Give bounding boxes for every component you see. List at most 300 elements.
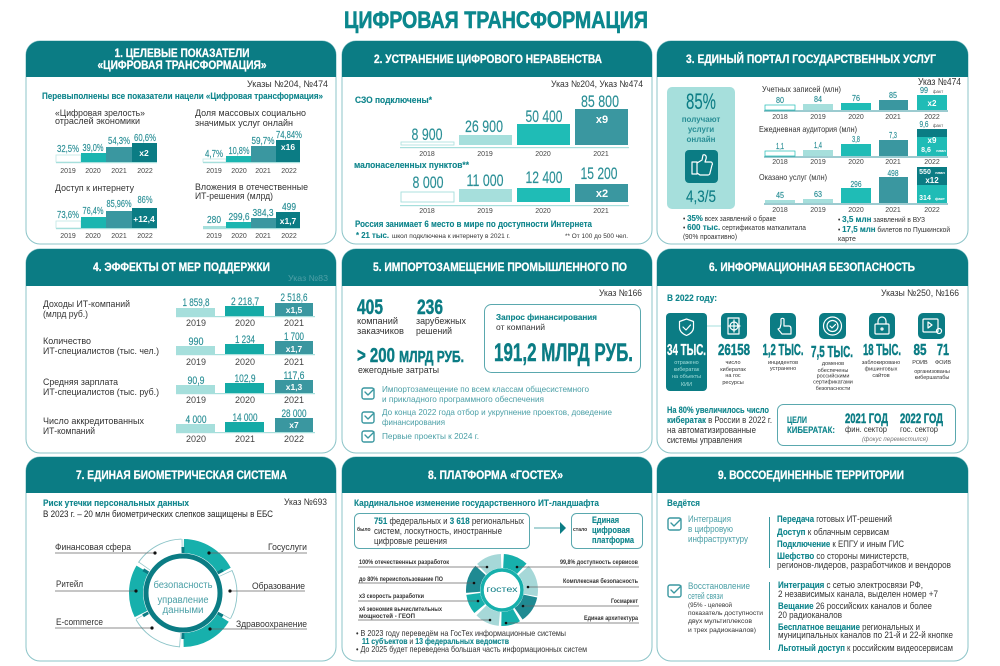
chart: daily audience: 8,6	[921, 147, 931, 154]
box: after: Единая	[592, 515, 619, 525]
chart: services delivered: 45	[776, 191, 784, 200]
icon: check 1	[362, 388, 374, 399]
checklist: финансирования	[382, 417, 445, 427]
heading 6: 6. ИНФОРМАЦИОННАЯ БЕЗОПАСНОСТЬ	[709, 262, 915, 274]
bullets right: карте	[838, 236, 856, 243]
row: IT revenue: 1 859,8	[182, 297, 210, 309]
icon: thumbs up	[685, 150, 718, 183]
label: compute savings: x4 экономия вычислительных	[359, 606, 442, 613]
row: IT revenue: 2021	[284, 318, 304, 328]
chart: internet access: 76,4%	[82, 206, 104, 217]
list: integration details	[777, 514, 951, 570]
list: network details: 2 независимых канала, выделен номер +7	[778, 589, 938, 599]
stat: 26158 attacks on state resources: на гос	[725, 373, 741, 379]
stat: 405 customers: 405	[357, 296, 383, 319]
callout: attack targets: гос. сектор	[900, 425, 939, 434]
item: network restoration: сетей связи	[688, 591, 723, 601]
stat: yearly costs	[357, 345, 464, 375]
box: after: цифровая	[592, 525, 630, 535]
note: 80 percent growth: системы управления	[667, 435, 742, 445]
label: education	[228, 581, 305, 593]
chart: daily audience: 1,1	[776, 142, 784, 151]
chart: internet access	[55, 183, 157, 240]
chart: small settlements	[354, 160, 629, 215]
donut diagram: безопасность	[154, 579, 212, 591]
row: IT specialists: 2019	[186, 357, 206, 367]
chart: small settlements: x2	[596, 188, 608, 200]
icon: check integration	[668, 518, 681, 530]
chart: accounts: факт	[933, 89, 943, 94]
callout: 85 percent online: услуги	[688, 125, 714, 134]
list: integration details: регионов-лидеров, разработчиков и вендоров	[777, 560, 951, 570]
list: integration details: Передача готовых ИТ-решений	[777, 514, 892, 524]
bullets left: • 35% всех заявлений о браке	[683, 213, 776, 223]
row: accredited companies: 2022	[284, 434, 304, 444]
chart: daily audience: 2018	[772, 159, 788, 166]
note: 80 percent growth: На 80% увеличилось число	[667, 405, 769, 415]
chart: daily audience: факт	[933, 123, 943, 128]
list: network details: Вещание 26 российских каналов и более	[778, 601, 932, 611]
row: IT specialists: 2021	[284, 357, 304, 367]
list: network details	[778, 580, 953, 653]
chart: domestic IT investment: Вложения в отечественные	[195, 182, 308, 193]
stat: 26158 attacks on state resources: число	[725, 360, 741, 366]
chart: accounts: 2021	[885, 114, 901, 121]
bullets	[356, 628, 587, 654]
decree reference: Указы №250, №166	[881, 288, 959, 299]
label: security	[527, 577, 639, 588]
heading 2: 2. УСТРАНЕНИЕ ЦИФРОВОГО НЕРАВЕНСТВА	[374, 54, 602, 66]
stat: 405 customers: компаний	[357, 316, 398, 326]
label: finance: Финансовая сфера	[55, 542, 132, 553]
stat: 85 and 71 cyber HQ	[912, 313, 951, 381]
row: average salary: 2021	[284, 395, 304, 405]
chart: SZO connected	[355, 92, 629, 158]
icon: check 2	[362, 412, 374, 423]
bullets left: (90% проактивно)	[683, 234, 737, 241]
footnotes	[356, 230, 628, 240]
label: healthcare: Здравоохранение	[236, 619, 307, 630]
row: IT specialists: ИТ-специалистов (тыс. чел.)	[43, 346, 159, 357]
row: IT specialists: 1 700	[284, 331, 304, 343]
decree reference: Указ №474	[918, 77, 961, 88]
item: network restoration: показатель доступности	[688, 610, 763, 617]
item: integration	[688, 514, 748, 544]
stat: 18 thousand phishing sites: заблокировано	[862, 360, 900, 366]
chart: services delivered: Оказано услуг (млн)	[759, 172, 827, 182]
chart: services delivered: 2020	[848, 207, 864, 214]
chart: online services share: Доля массовых социально	[195, 108, 306, 119]
row: IT specialists: 990	[188, 336, 204, 348]
stat: 26158 attacks on state resources	[718, 313, 750, 386]
stat: 85 and 71 cyber HQ: РОИВ	[912, 360, 928, 366]
row: IT specialists: 2020	[235, 357, 255, 367]
decree reference: Указ №693	[284, 497, 327, 508]
chart: services delivered: факт	[935, 196, 945, 201]
stat: 1.2 thousand incidents: инцидентов	[768, 360, 798, 366]
subheading: Риск утечки персональных данных	[43, 498, 189, 508]
bullets: 11 субъектов и 13 федеральных ведомств	[362, 636, 509, 646]
stat: 236 foreign solutions: 236	[417, 296, 443, 319]
chart: accounts: 2018	[772, 114, 788, 121]
panel 4: support effects	[26, 249, 336, 453]
chart: domestic IT investment	[195, 182, 308, 240]
checklist: Импортозамещение по всем классам общесистемного	[382, 384, 589, 394]
item: network restoration: и трех радиоканалов)	[688, 627, 756, 634]
stat: 405 customers: заказчиков	[357, 326, 404, 336]
heading 9: 9. ВОССОЕДИНЕННЫЕ ТЕРРИТОРИИ	[718, 470, 904, 482]
chart: SZO connected: x9	[596, 114, 608, 126]
chart: domestic IT investment: 2021	[255, 233, 271, 240]
checklist: Первые проекты к 2024 г.	[382, 431, 479, 441]
heading 8: 8. ПЛАТФОРМА «ГОСТЕХ»	[428, 470, 563, 482]
bullets left	[683, 213, 806, 241]
chart: domestic IT investment: 2022	[281, 233, 297, 240]
chart: SZO connected: СЗО подключены*	[355, 95, 432, 105]
box: after: стало	[573, 527, 587, 533]
chart: digital maturity: x2	[139, 148, 149, 158]
callout: attack targets: ЦЕЛИ	[787, 415, 807, 426]
stat: 18 thousand phishing sites: сайтов	[872, 372, 890, 379]
chart: SZO connected: 26 900	[465, 117, 503, 136]
stat: 85 and 71 cyber HQ: 71	[937, 342, 949, 359]
label: retail: Ритейл	[56, 579, 83, 590]
stat card: 34 thousand attacks: КИИ	[681, 382, 692, 388]
item: integration: в цифровую	[688, 524, 733, 534]
text block: В 2023 г. – 20 млн биометрических слепков защищены в ЕБС	[43, 509, 273, 519]
stat card: 34 thousand attacks	[666, 313, 721, 391]
chart: services delivered	[759, 167, 948, 214]
stat: 1.2 thousand incidents	[762, 313, 804, 372]
chart: SZO connected: 2019	[477, 151, 493, 158]
label: e-commerce: E-commerce	[56, 617, 103, 628]
callout: attack targets: 2022 ГОД	[900, 410, 943, 426]
subheading: В 2022 году:	[667, 293, 717, 303]
heading 7: 7. ЕДИНАЯ БИОМЕТРИЧЕСКАЯ СИСТЕМА	[76, 470, 287, 482]
label: retail	[55, 579, 138, 593]
chart: internet access: 73,6%	[57, 210, 79, 221]
icon: check 3	[362, 431, 374, 442]
chart: digital maturity: 60,6%	[134, 133, 156, 144]
row: average salary: 102,9	[234, 373, 256, 385]
stat: 7.5 thousand domains	[811, 313, 853, 392]
chart: digital maturity: 2020	[85, 168, 101, 175]
label: gosuslugi	[207, 542, 307, 555]
chart: domestic IT investment: 2020	[231, 233, 247, 240]
row: IT specialists: Количество	[43, 336, 91, 347]
chart: daily audience: 2022	[924, 159, 940, 166]
stat: 7.5 thousand domains: российскими	[817, 372, 849, 380]
title: ЦИФРОВАЯ ТРАНСФОРМАЦИЯ	[344, 7, 648, 34]
note: 80 percent growth: кибератак в России в 2022 г.	[667, 415, 772, 425]
callout: 85 percent online	[667, 87, 735, 209]
box: after: платформа	[592, 535, 635, 545]
box: before: было	[357, 526, 371, 533]
chart: daily audience: Ежедневная аудитория (млн)	[759, 124, 857, 134]
box: before: цифровые решения	[374, 536, 447, 546]
chart: accounts: 76	[852, 94, 860, 103]
chart: online services share: 2022	[281, 168, 297, 175]
stat: 26158 attacks on state resources: ресурсы	[722, 380, 744, 386]
chart: digital maturity: 32,5%	[57, 144, 79, 155]
chart: services delivered: 2021	[885, 207, 901, 214]
callout: attack targets: 2021 ГОД	[845, 410, 888, 426]
callout: financing request: от компаний	[496, 322, 545, 332]
list: network details: 20 радиоканалов	[778, 610, 842, 620]
chart: digital maturity	[55, 108, 157, 175]
chart: SZO connected: 85 800	[581, 92, 619, 111]
chart: daily audience: 2021	[885, 159, 901, 166]
stat card: 34 thousand attacks: отражено	[674, 360, 699, 366]
row: average salary	[43, 370, 315, 405]
icon: shield	[680, 319, 694, 336]
bullets left: • 600 тыс. сертификатов маткапитала	[683, 222, 806, 232]
icon: check networks	[668, 585, 681, 597]
label: gosmarket	[522, 598, 639, 607]
chart: accounts: 2020	[848, 114, 864, 121]
decree reference: Указ №166	[599, 288, 642, 299]
subheading: Перевыполнены все показатели нацели «Цифровая трансформация»	[42, 91, 323, 101]
chart: daily audience: x9	[928, 136, 937, 145]
checklist: До конца 2022 года отбор и укрупнение проектов, доведение	[382, 407, 612, 417]
item: network restoration: (95% - целевой	[688, 601, 732, 609]
note: Russia rank: Россия занимает 6 место в мире по доступности Интернета	[355, 219, 593, 229]
chart: SZO connected: 2018	[419, 151, 435, 158]
box: after	[572, 514, 642, 548]
row: accredited companies: 28 000	[282, 408, 306, 420]
chart: online services share: 59,7%	[252, 136, 275, 147]
chart: daily audience: 2019	[810, 159, 826, 166]
chart: accounts	[762, 84, 948, 121]
heading 1	[98, 48, 266, 72]
donut diagram: управление	[158, 595, 209, 606]
stat: yearly costs: > 200 МЛРД РУБ.	[357, 345, 464, 367]
chart: accounts: 80	[776, 96, 784, 105]
chart: online services share: 2020	[231, 168, 247, 175]
label: domestic development	[358, 558, 488, 568]
callout: 85 percent online: получают	[682, 115, 720, 124]
chart: domestic IT investment: x1,7	[280, 216, 297, 226]
chart: domestic IT investment: 299,6	[228, 212, 250, 223]
donut diagram: гостех	[486, 585, 518, 594]
chart: services delivered: 550	[919, 169, 931, 176]
chart: internet access: 2022	[137, 233, 153, 240]
stat: 236 foreign solutions: зарубежных	[416, 316, 466, 326]
list: network details: Бесплатное вещание региональных и	[778, 622, 920, 632]
row: IT revenue: 2 218,7	[231, 296, 259, 308]
chart: services delivered: 314	[919, 195, 931, 202]
stat: 85 and 71 cyber HQ: организованы	[914, 369, 950, 375]
footnotes: школ подключена к интернету в 2021 г.	[392, 234, 510, 240]
chart: small settlements: 2018	[419, 208, 435, 215]
chart: digital maturity: 2022	[137, 168, 153, 175]
chart: services delivered: 2022	[924, 207, 940, 214]
row: accredited companies: ИТ-компаний	[43, 426, 95, 437]
chart: domestic IT investment: 280	[207, 215, 221, 226]
label: compute savings: мощностей - ГЕОП	[359, 612, 415, 620]
stat: 18 thousand phishing sites: 18 ТЫС.	[863, 342, 901, 359]
chart: online services share	[195, 108, 306, 175]
callout: financing request: Запрос финансирования	[496, 312, 597, 322]
stat: 7.5 thousand domains: сертификатами	[813, 380, 853, 386]
subheading: Кардинальное изменение государственного ИТ-ландшафта	[354, 498, 600, 509]
stat: 236 foreign solutions: решений	[416, 326, 452, 336]
callout: 85 percent online: 85%	[686, 89, 716, 114]
stat: 405 customers	[357, 296, 404, 336]
chart: services delivered: x12	[925, 176, 939, 185]
chart: domestic IT investment: 499	[282, 202, 296, 213]
label: gosmarket: Госмаркет	[611, 598, 638, 605]
chart: internet access: Доступ к интернету	[55, 183, 134, 194]
bullets: • До 2025 будет переведена большая часть информационных систем	[356, 644, 587, 654]
row: average salary: 117,6	[284, 370, 304, 382]
panel 2: digital divide	[342, 41, 652, 244]
footnotes: * 21 тыс.	[356, 230, 389, 240]
bullets right	[838, 214, 950, 243]
checklist	[362, 384, 612, 442]
arrow	[534, 522, 566, 534]
panel 7: biometric system	[26, 457, 336, 665]
donut diagram	[461, 549, 543, 631]
chart: accounts: x2	[928, 99, 937, 108]
list: network details: муниципальных каналов по 21-й и 22-й кнопке	[778, 630, 953, 640]
chart: services delivered: 498	[888, 169, 899, 178]
chart: small settlements: 15 200	[580, 164, 618, 183]
label: architecture	[505, 615, 639, 624]
chart: small settlements: 12 400	[526, 168, 562, 187]
panel 3: state services portal	[657, 41, 968, 244]
list: integration details: Подключение к ЕПГУ и иным ГИС	[777, 539, 904, 549]
chart: online services share: значимых услуг онлайн	[195, 118, 293, 129]
label: reuse: до 80% переиспользование ПО	[359, 576, 443, 583]
chart: digital maturity: «Цифровая зрелость»	[55, 108, 145, 119]
box: before	[354, 514, 530, 548]
label: e-commerce	[55, 617, 154, 630]
callout: attack targets: КИБЕРАТАК:	[787, 425, 835, 436]
bullets right: • 3,5 млн заявлений в ВУЗ	[838, 214, 925, 224]
list: integration details: Шефство со стороны министерств,	[777, 551, 909, 561]
chart: daily audience: 1,4	[814, 141, 822, 150]
chart: daily audience: 2020	[848, 159, 864, 166]
callout: attack targets: фин. сектор	[845, 425, 888, 434]
panel 1: target indicators	[26, 41, 336, 244]
label: healthcare	[208, 619, 307, 631]
chart: internet access: 85,96%	[106, 199, 132, 210]
chart: small settlements: 2019	[477, 208, 493, 215]
chart: digital maturity: отраслей экономики	[55, 116, 140, 127]
stat: 85 and 71 cyber HQ: кибершатабы	[915, 375, 949, 381]
chart: services delivered: 296	[850, 180, 862, 189]
label: gosuslugi: Госуслуги	[268, 542, 307, 553]
stat: 26158 attacks on state resources: кибератак	[720, 367, 746, 373]
panel 8: Gostech platform	[342, 457, 652, 661]
panel 6: information security	[657, 249, 968, 453]
heading 5: 5. ИМПОРТОЗАМЕЩЕНИЕ ПРОМЫШЛЕННОГО ПО	[373, 262, 627, 274]
heading 1: «ЦИФРОВАЯ ТРАНСФОРМАЦИЯ»	[98, 60, 266, 72]
subheading: Ведётся	[667, 498, 700, 508]
stat: 7.5 thousand domains: 7,5 ТЫС.	[811, 344, 853, 361]
chart: accounts: 2019	[810, 114, 826, 121]
label: compute savings	[358, 606, 491, 621]
chart: internet access: 2020	[85, 233, 101, 240]
stat: 18 thousand phishing sites: фишинговых	[865, 366, 898, 372]
heading 4: 4. ЭФФЕКТЫ ОТ МЕР ПОДДЕРЖКИ	[93, 262, 270, 274]
stat card: 34 thousand attacks: на объекты	[672, 374, 701, 380]
chart: small settlements: малонаселенных пунктов**	[354, 160, 469, 170]
row: accredited companies: 4 000	[186, 414, 206, 426]
label: availability	[516, 559, 639, 568]
panel 5: import substitution	[342, 249, 652, 453]
item: network restoration: двух мультиплексов	[688, 618, 753, 625]
row: average salary: 2020	[235, 395, 255, 405]
chart: services delivered: 63	[814, 190, 822, 199]
chart: services delivered: план	[935, 170, 945, 175]
row: average salary: 90,9	[188, 375, 204, 387]
chart: online services share: 4,7%	[205, 149, 223, 160]
item: integration: инфраструктуру	[688, 534, 748, 544]
chart: internet access: 2021	[111, 233, 127, 240]
donut diagram	[111, 521, 255, 665]
chart: domestic IT investment: ИТ-решения (млрд)	[195, 191, 273, 202]
chart: daily audience	[759, 120, 948, 166]
row: accredited companies: Число аккредитованных	[43, 416, 144, 427]
chart: SZO connected: 8 900	[412, 125, 442, 144]
row: IT specialists: 1 234	[235, 334, 255, 346]
row: accredited companies	[43, 408, 315, 444]
label: architecture: Единая архитектура	[584, 615, 638, 622]
row: accredited companies: 14 000	[232, 412, 258, 424]
chart: SZO connected: 2020	[535, 151, 551, 158]
row: accredited companies: x7	[289, 420, 299, 430]
chart: accounts: 85	[889, 91, 897, 100]
decree reference: Указ №204, Указ №474	[551, 79, 643, 90]
chart: internet access: 2019	[60, 233, 76, 240]
heading 3: 3. ЕДИНЫЙ ПОРТАЛ ГОСУДАРСТВЕННЫХ УСЛУГ	[686, 53, 936, 66]
row: IT specialists	[43, 331, 315, 367]
chart: daily audience: план	[936, 148, 946, 153]
box: before: 751 федеральных и 3 618 региональных	[374, 516, 524, 526]
row: accredited companies: 2020	[186, 434, 206, 444]
row: IT revenue: 2019	[186, 318, 206, 328]
stat card: 34 thousand attacks: кибератак	[674, 367, 700, 373]
stat: 1.2 thousand incidents: устранено	[770, 366, 796, 372]
chart: accounts: Учетных записей (млн)	[762, 84, 841, 94]
chart: online services share: 2019	[206, 168, 222, 175]
chart: SZO connected: 50 400	[526, 107, 562, 126]
callout: attack targets: (фокус переместился)	[862, 436, 928, 443]
note: 80 percent growth: на автоматизированные	[667, 425, 756, 435]
label: dev speed	[358, 592, 479, 602]
chart: small settlements: 2021	[593, 208, 609, 215]
item: network restoration	[688, 581, 763, 634]
callout: financing request: 191,2 МЛРД РУБ.	[494, 339, 633, 367]
stat: 85 and 71 cyber HQ: ФОИВ	[935, 360, 951, 366]
item: network restoration: Восстановление	[688, 581, 750, 591]
label: domestic development: 100% отечественных разработок	[359, 558, 450, 566]
item: integration: Интеграция	[688, 514, 731, 524]
chart: small settlements: 11 000	[466, 171, 504, 190]
chart: accounts: 84	[814, 95, 822, 104]
chart: digital maturity: 2019	[60, 168, 76, 175]
stat: 7.5 thousand domains: обеспечены	[818, 368, 848, 374]
decree reference: Указы №204, №474	[247, 79, 328, 90]
callout: 85 percent online: 4,3/5	[686, 187, 716, 206]
chart: domestic IT investment: 2019	[206, 233, 222, 240]
panel 9: reunited territories	[657, 457, 968, 661]
chart: internet access: +12,4	[133, 214, 155, 224]
row: IT specialists: x1,7	[286, 344, 303, 354]
row: average salary: Средняя зарплата	[43, 377, 119, 388]
